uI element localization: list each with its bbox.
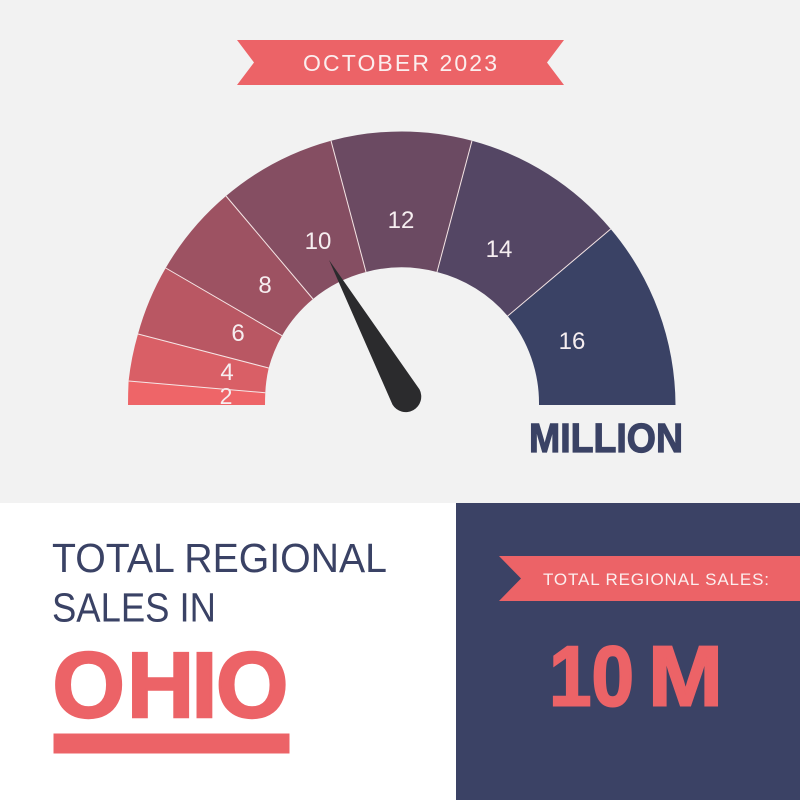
gauge segment 4 xyxy=(129,334,269,393)
gauge segment 10: 10 xyxy=(305,228,331,255)
ribbon: date xyxy=(237,40,564,85)
gauge segment 12 xyxy=(331,131,472,272)
gauge segment 12: 12 xyxy=(388,207,414,234)
state name: OHIO xyxy=(52,633,288,737)
heading xyxy=(52,535,387,630)
panel: total sales xyxy=(456,503,800,800)
gauge segment 6 xyxy=(138,268,282,368)
ribbon: total regional sales xyxy=(499,556,800,601)
gauge segment 14: 14 xyxy=(486,236,512,263)
gauge needle xyxy=(329,260,421,412)
gauge segment 2 xyxy=(128,381,265,409)
ribbon: total regional sales: TOTAL REGIONAL SALES: xyxy=(543,570,769,589)
gauge segment 10 xyxy=(226,141,366,299)
heading: SALES IN xyxy=(52,584,216,630)
panel: gauge background xyxy=(0,0,800,503)
gauge segment 6: 6 xyxy=(231,320,245,347)
heading: TOTAL REGIONAL xyxy=(52,535,387,581)
unit label: MILLION xyxy=(529,415,683,461)
gauge segment 16: 16 xyxy=(559,328,585,355)
gauge segment 14 xyxy=(437,141,611,316)
gauge segment 2: 2 xyxy=(220,383,232,409)
total value: M xyxy=(648,630,723,724)
gauge segment 4: 4 xyxy=(220,359,234,386)
panel: title text background xyxy=(0,503,456,800)
state underline xyxy=(54,734,290,754)
gauge segment 8: 8 xyxy=(258,272,272,299)
gauge segment 16 xyxy=(508,229,676,405)
ribbon: date: OCTOBER 2023 xyxy=(303,50,497,76)
gauge segment 8 xyxy=(166,196,313,336)
total value xyxy=(549,630,723,724)
total value: 10 xyxy=(549,630,634,724)
gauge chart xyxy=(128,131,676,409)
